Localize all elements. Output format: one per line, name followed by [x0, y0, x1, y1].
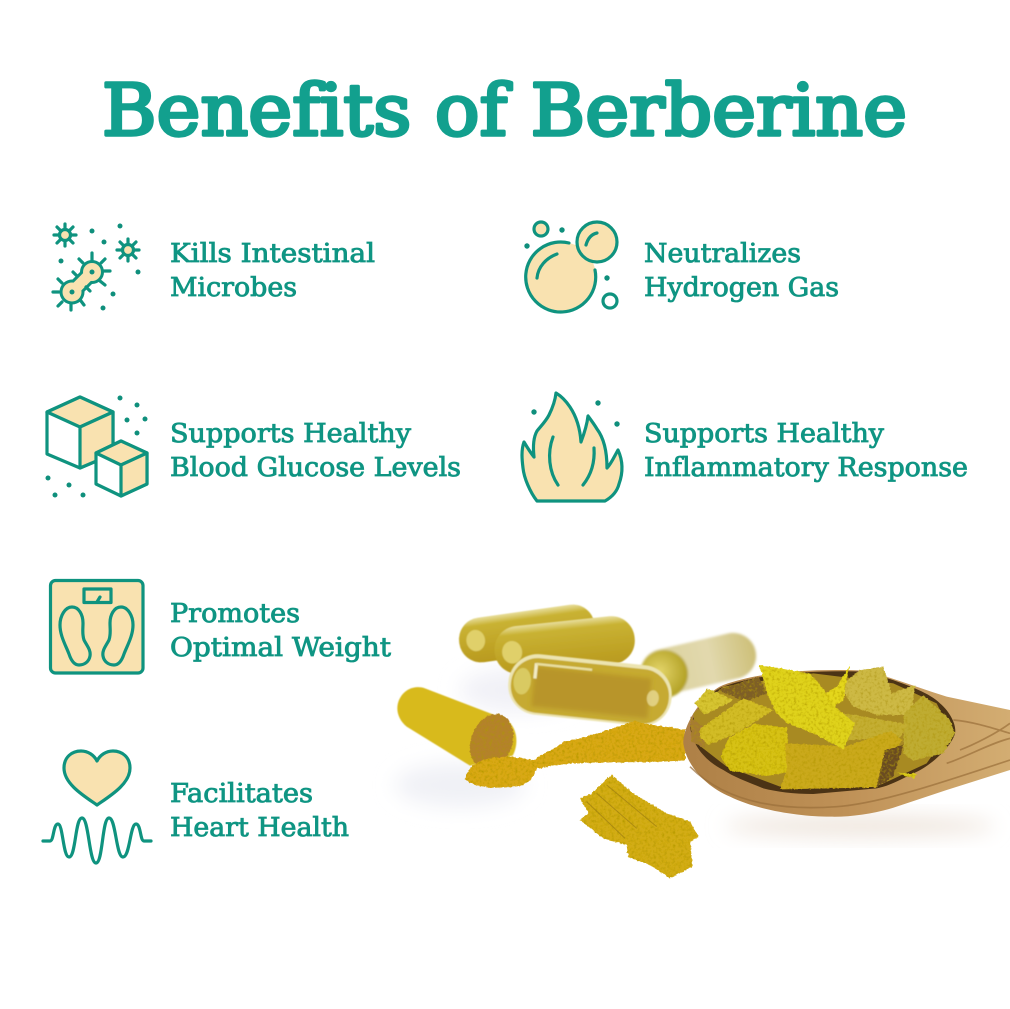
benefit: inflammatory response: Supports Healthy [644, 418, 884, 449]
benefit: optimal weight: Optimal Weight [170, 632, 391, 663]
icon: sugar cubes [46, 396, 148, 498]
icon: heart and pulse wave [43, 751, 151, 863]
benefit: blood glucose [170, 418, 461, 483]
spoon [683, 665, 1010, 817]
benefit: inflammatory response [644, 418, 968, 483]
benefit: heart health: Facilitates [170, 778, 313, 809]
benefit: neutralizes hydrogen gas: Hydrogen Gas [644, 272, 839, 303]
bowl interior [690, 671, 955, 794]
capsule: front [505, 651, 675, 729]
spoon body and handle [683, 670, 1010, 817]
benefit: inflammatory response: Inflammatory Response [644, 452, 968, 483]
benefit: kills intestinal microbes: Kills Intestinal [170, 238, 375, 269]
capsules and powder [397, 602, 685, 788]
benefit: kills intestinal microbes: Microbes [170, 272, 297, 303]
benefit: blood glucose: Blood Glucose Levels [170, 452, 461, 483]
benefit: heart health [170, 778, 349, 843]
benefit: neutralizes hydrogen gas [644, 238, 839, 303]
photo: berberine capsules, powder and wooden spoon [395, 602, 1010, 878]
soft shadows [395, 668, 995, 837]
icon: weight scale [50, 580, 143, 673]
capsule: back [456, 602, 598, 665]
capsule: second [492, 614, 637, 676]
flake base layer [693, 673, 950, 787]
loose root piece [580, 775, 698, 878]
benefit: optimal weight [170, 598, 391, 663]
benefit: optimal weight: Promotes [170, 598, 300, 629]
root flakes in spoon [690, 665, 955, 789]
title: Benefits of Berberine [102, 69, 907, 152]
benefit: blood glucose: Supports Healthy [170, 418, 411, 449]
icon: bubbles [524, 222, 617, 312]
icon: flame [522, 393, 622, 501]
powder [465, 721, 685, 788]
capsule: open [397, 687, 516, 766]
icon: microbes [53, 224, 140, 310]
benefit: kills intestinal microbes [170, 238, 375, 303]
benefit: neutralizes hydrogen gas: Neutralizes [644, 238, 801, 269]
capsule: right, light [636, 628, 761, 699]
benefit: heart health: Heart Health [170, 812, 349, 843]
